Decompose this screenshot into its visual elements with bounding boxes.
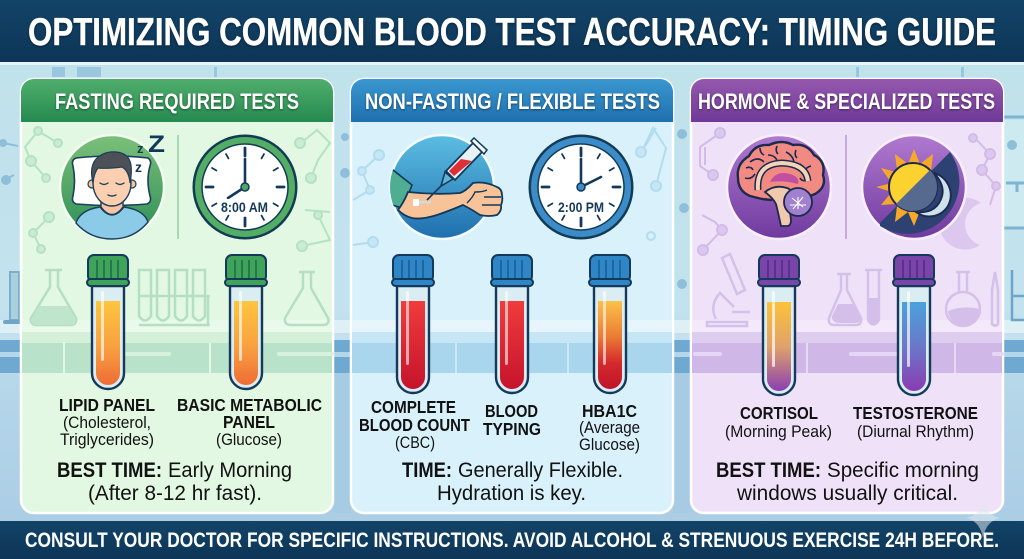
icon: sleeping person: z: [135, 159, 142, 175]
icon: blood draw from arm: [388, 135, 502, 239]
label: hba1c: HBA1C: [582, 401, 637, 421]
label: complete blood count: (CBC): [395, 433, 435, 452]
label: cortisol: (Morning Peak): [725, 422, 832, 441]
heading band: [691, 79, 1003, 122]
panel: fasting required tests: [21, 79, 333, 513]
label: basic metabolic panel: [177, 395, 322, 449]
label: hba1c: Glucose): [579, 435, 640, 454]
tube: basic metabolic panel: [225, 255, 267, 389]
heading band: FASTING REQUIRED TESTS: [55, 89, 299, 114]
icon: sun and moon cycle: [862, 135, 966, 239]
note: time: [402, 458, 623, 505]
label: blood typing: BLOOD: [485, 401, 538, 421]
divider: [845, 135, 847, 239]
label: complete blood count: COMPLETE: [371, 397, 456, 417]
tube: cortisol: [758, 255, 800, 395]
note: time: TIME:: [402, 458, 452, 482]
label: blood typing: TYPING: [483, 419, 541, 439]
label: basic metabolic panel: (Glucose): [216, 430, 282, 449]
label: hba1c: [579, 401, 640, 454]
label: complete blood count: BLOOD COUNT: [359, 415, 470, 435]
label: hba1c: (Average: [579, 418, 640, 437]
icon: sleeping person: [60, 131, 165, 239]
label: blood typing: [483, 401, 541, 439]
note: best time: [57, 458, 292, 505]
label: lipid panel: (Cholesterol,: [63, 413, 151, 432]
label: basic metabolic panel: BASIC METABOLIC: [177, 395, 322, 415]
tube: testosterone: [893, 255, 935, 395]
icon: clock 2:00 PM: [528, 134, 634, 240]
label: testosterone: [853, 403, 978, 441]
label: basic metabolic panel: PANEL: [223, 412, 275, 432]
icon: brain: [727, 135, 831, 239]
icon: clock 8:00 AM: 8:00 AM: [221, 199, 268, 215]
tube: blood typing: [491, 255, 533, 393]
note: best time: BEST TIME:: [57, 458, 162, 482]
note: best time: BEST TIME:: [716, 458, 821, 482]
label: lipid panel: Triglycerides): [60, 430, 154, 449]
label: lipid panel: [59, 395, 155, 449]
note: time: Generally Flexible.: [458, 458, 623, 482]
label: testosterone: (Diurnal Rhythm): [857, 422, 974, 441]
icon: sparkle watermark: [966, 501, 1000, 538]
heading band: [21, 79, 333, 122]
label: testosterone: TESTOSTERONE: [853, 403, 978, 423]
heading band: NON-FASTING / FLEXIBLE TESTS: [365, 89, 660, 114]
note: best time: (After 8-12 hr fast).: [88, 481, 262, 505]
icon: clock 2:00 PM: 2:00 PM: [558, 199, 604, 215]
note: best time: Specific morning: [827, 458, 979, 482]
label: lipid panel: LIPID PANEL: [59, 395, 155, 415]
tube: hba1c: [589, 255, 631, 393]
tube: lipid panel: [87, 255, 129, 389]
label: cortisol: [725, 403, 832, 441]
note: best time: [716, 458, 979, 505]
heading band: [351, 79, 673, 122]
icon: sleeping person: z: [137, 141, 144, 156]
title banner: [0, 0, 1024, 65]
divider: [177, 135, 179, 239]
footer banner: [0, 521, 1024, 559]
panel: non-fasting tests: [351, 79, 673, 513]
icon: clock 8:00 AM: [192, 134, 298, 240]
tube: complete blood count: [392, 255, 434, 393]
note: time: Hydration is key.: [437, 481, 586, 505]
note: best time: Early Morning: [168, 458, 292, 482]
note: best time: windows usually critical.: [736, 481, 958, 505]
panel: hormone and specialized tests: [691, 79, 1003, 513]
label: complete blood count: [359, 397, 470, 452]
icon: sleeping person: Z: [148, 131, 165, 158]
label: cortisol: CORTISOL: [740, 403, 818, 423]
